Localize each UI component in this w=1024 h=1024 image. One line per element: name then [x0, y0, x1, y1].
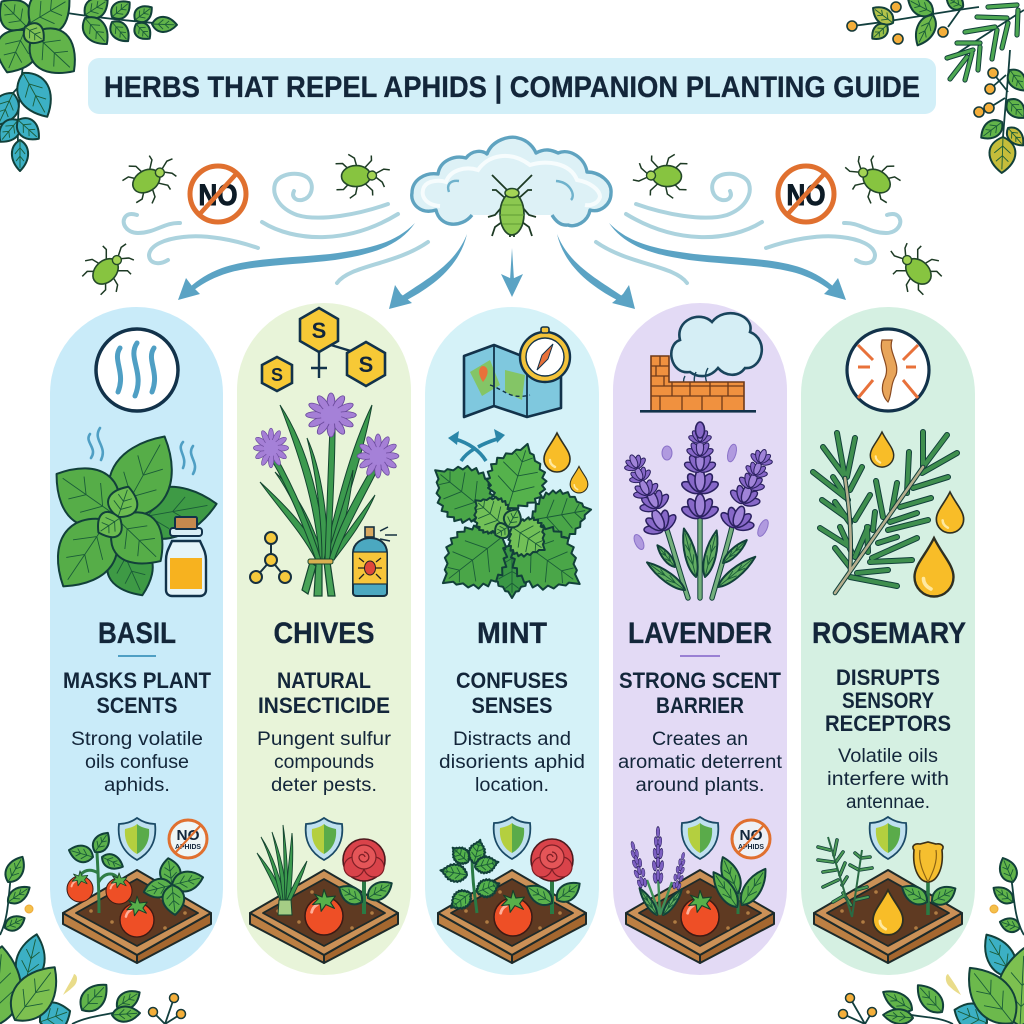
icon: oil drops	[544, 433, 588, 493]
icon: big aphid	[488, 175, 536, 237]
illustration: lavender sprigs	[620, 422, 776, 598]
description: location.	[475, 775, 549, 796]
aphids scattered, left	[76, 144, 391, 301]
garden bed: rosemary, oil drop, yellow rose	[814, 817, 962, 963]
subheading: MASKS PLANT	[63, 668, 212, 693]
description	[71, 729, 203, 796]
description: antennae.	[846, 792, 930, 813]
wind swirls right	[596, 174, 900, 283]
illustration: basil leaves	[40, 422, 221, 605]
description	[618, 729, 783, 796]
subheading: RECEPTORS	[825, 711, 951, 736]
no aphids badge: NO	[176, 827, 200, 844]
description: Creates an	[652, 729, 748, 750]
arrow: to basil	[178, 223, 415, 300]
subheading: SENSORY	[842, 688, 934, 713]
title banner	[88, 58, 936, 114]
subheading: INSECTICIDE	[258, 693, 390, 718]
description	[439, 729, 585, 796]
subheading	[456, 668, 568, 718]
icon: confused arrows	[448, 429, 505, 461]
description: interfere with	[827, 769, 949, 790]
illustration: chive bundle	[253, 393, 399, 596]
herb name: BASIL	[98, 617, 176, 650]
garden bed: chives, tomato, rose	[250, 818, 398, 963]
description	[827, 746, 949, 813]
icon: sulfur molecules: S	[359, 352, 373, 377]
panel: mint	[417, 307, 599, 975]
no aphids badge: APHIDS	[175, 844, 201, 851]
scent cloud with aphid	[412, 137, 611, 237]
garden bed: mint, tomato, rose	[438, 817, 586, 963]
description: compounds	[274, 752, 374, 773]
wind swirls left	[124, 174, 428, 283]
no aphids badge: APHIDS	[738, 844, 764, 851]
subheading	[63, 668, 212, 718]
icon: oil drops	[870, 432, 964, 596]
icon: essential oil jar	[166, 517, 206, 596]
illustration: rosemary sprigs	[813, 432, 957, 593]
panel: chives	[237, 303, 411, 975]
icon: disrupted antenna	[847, 329, 929, 411]
decorative corner foliage: top left	[0, 0, 177, 171]
arrow: to mint	[501, 248, 523, 297]
icon: brick wall and scent cloud	[640, 313, 762, 413]
description: disorients aphid	[439, 752, 585, 773]
icon: sulfur molecules: S	[312, 318, 326, 343]
subheading	[825, 665, 951, 736]
subheading: BARRIER	[656, 693, 744, 718]
subheading: DISRUPTS	[836, 665, 940, 690]
no aphids sign left: NO	[198, 179, 238, 212]
subheading: NATURAL	[277, 668, 371, 693]
icon: sulfur molecules: S	[271, 365, 283, 385]
heading underline	[118, 655, 156, 657]
no aphids badge: NO	[740, 827, 763, 844]
panel: basil	[40, 307, 223, 975]
subheading: STRONG SCENT	[619, 668, 782, 693]
description: deter pests.	[271, 775, 377, 796]
decorative corner foliage: bottom left	[0, 853, 186, 1024]
decorative corner foliage: bottom right	[838, 855, 1024, 1024]
title banner: HERBS THAT REPEL APHIDS | COMPANION PLANTING GUIDE	[104, 71, 920, 104]
icon: spray bottle	[353, 527, 397, 596]
description: Distracts and	[453, 729, 571, 750]
no aphids sign right	[778, 166, 834, 222]
garden bed: tomato and basil	[63, 818, 211, 963]
panel: lavender	[613, 303, 787, 975]
description: around plants.	[636, 775, 764, 796]
description: Volatile oils	[838, 746, 938, 767]
description: oils confuse	[85, 752, 189, 773]
herb name: MINT	[477, 617, 547, 650]
illustration: mint leaves	[417, 435, 598, 610]
no aphids sign right: NO	[786, 179, 826, 212]
garden bed: lavender, tomato, leaves	[626, 817, 774, 963]
icon: sulfur molecules	[262, 308, 385, 391]
description: Strong volatile	[71, 729, 203, 750]
description: aromatic deterrent	[618, 752, 783, 773]
icon: scent waves	[96, 329, 178, 411]
subheading	[258, 668, 390, 718]
arrow: to chives	[389, 234, 467, 309]
aphids scattered, right	[632, 144, 948, 301]
subheading: SCENTS	[96, 693, 178, 718]
subheading: SENSES	[472, 693, 552, 718]
herb name: ROSEMARY	[812, 617, 966, 650]
no aphids sign left	[190, 166, 246, 222]
subheading	[619, 668, 782, 718]
icon: map and compass	[464, 327, 570, 417]
herb name: LAVENDER	[628, 617, 772, 650]
arrows to herb columns	[178, 223, 846, 309]
no aphids badge	[732, 820, 770, 858]
icon: molecule	[250, 532, 291, 583]
subheading: CONFUSES	[456, 668, 568, 693]
description: Pungent sulfur	[257, 729, 392, 750]
panel: rosemary	[801, 307, 975, 975]
arrow: to rosemary	[609, 223, 846, 300]
herb name: CHIVES	[274, 617, 374, 650]
description: aphids.	[104, 775, 170, 796]
no aphids badge	[169, 820, 207, 858]
arrow: to lavender	[557, 234, 635, 309]
description	[257, 729, 392, 796]
decorative corner foliage: top right	[847, 0, 1024, 173]
heading underline	[680, 655, 720, 657]
